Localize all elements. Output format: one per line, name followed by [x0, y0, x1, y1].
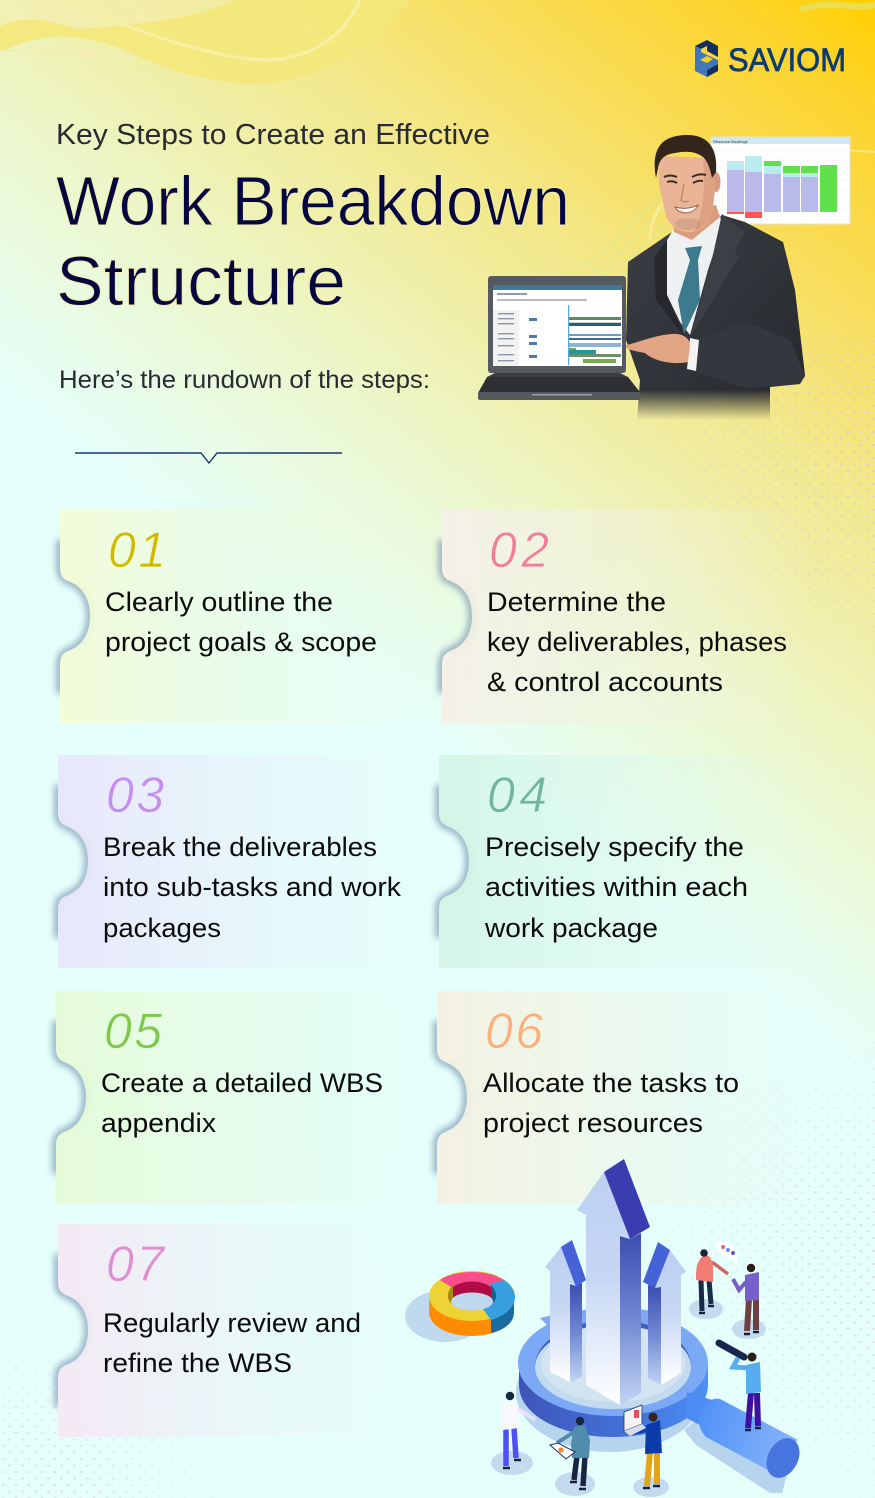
illustration: magnifier with growth arrows [516, 1159, 806, 1493]
person: purple shirt [732, 1264, 766, 1339]
telescope [719, 1343, 744, 1357]
chart card behind the man: Resource Bookings [713, 139, 748, 144]
number 04: 04 [487, 767, 547, 823]
person: telescope viewer [719, 1343, 761, 1430]
step text: Determine the [487, 587, 666, 617]
magnifier ring [519, 1363, 708, 1437]
step text: project resources [483, 1108, 703, 1138]
person: blue jacket with laptop [624, 1405, 669, 1497]
bars [727, 170, 744, 212]
wordmark: SAVIOM [728, 42, 846, 78]
tie [678, 246, 702, 334]
step text: Create a detailed WBS [101, 1068, 383, 1098]
laptop [478, 276, 640, 400]
lid [488, 276, 626, 373]
panel: step 02 [442, 510, 812, 723]
number 01: 01 [108, 522, 166, 578]
step text [487, 587, 787, 697]
person: teal shirt with tablet [550, 1417, 595, 1496]
panel: step 05 [56, 991, 426, 1204]
step text [105, 587, 377, 657]
person: white shirt [491, 1392, 535, 1475]
magnifier shadow [516, 1332, 704, 1452]
cuff [687, 338, 699, 371]
panel: step 03 [58, 755, 428, 968]
step text: appendix [101, 1108, 217, 1138]
magnifier handle neck [686, 1392, 720, 1425]
forearm [715, 328, 805, 388]
title: Work Breakdown [56, 162, 570, 240]
shirt [667, 214, 722, 335]
step text: Allocate the tasks to [483, 1068, 739, 1098]
number 07: 07 [106, 1236, 166, 1292]
tablet [550, 1443, 575, 1459]
step text: & control accounts [487, 667, 723, 697]
screen [493, 285, 622, 366]
title [56, 162, 570, 320]
step text [103, 832, 402, 943]
number 06: 06 [485, 1003, 543, 1059]
step text: packages [103, 913, 221, 943]
ear [714, 172, 720, 192]
dotted texture bottom right [672, 1062, 875, 1480]
panel: step 07 [58, 1224, 428, 1437]
face [658, 156, 715, 232]
cheek shading [694, 158, 715, 232]
stubble [675, 218, 701, 230]
step text: refine the WBS [103, 1348, 292, 1378]
arrow right [643, 1242, 686, 1385]
step text: work package [484, 913, 658, 943]
dotted texture right of header [665, 340, 875, 641]
step text: Regularly review and [103, 1308, 361, 1338]
step text [103, 1308, 361, 1378]
nose [681, 184, 689, 202]
logo: Saviom [695, 40, 846, 78]
icon: Saviom S cube [695, 40, 718, 77]
chart card behind the man [711, 137, 850, 224]
suit jacket [626, 215, 805, 420]
step text [101, 1068, 383, 1138]
panel: step 06 [437, 991, 807, 1204]
speech bubble [716, 1241, 738, 1266]
donut top [429, 1271, 515, 1321]
arrow centre [577, 1159, 650, 1405]
man presenting [623, 135, 805, 420]
gantt bars [569, 317, 621, 320]
arrow left [545, 1240, 586, 1382]
decorative waves behind the man [580, 4, 875, 278]
hair [655, 135, 716, 178]
panel: step 01 [60, 510, 430, 723]
panel: step 04 [439, 755, 809, 968]
divider with chevron [75, 453, 342, 463]
icon: donut chart [405, 1271, 515, 1342]
title: Structure [56, 242, 346, 320]
step text: Break the deliverables [103, 832, 377, 862]
number 05: 05 [104, 1003, 162, 1059]
number 03: 03 [106, 767, 164, 823]
smile [675, 205, 698, 213]
step text: into sub-tasks and work [103, 872, 402, 902]
hand [623, 334, 690, 363]
neck [672, 205, 720, 240]
laptop [624, 1405, 642, 1431]
donut hole [448, 1282, 496, 1310]
step text: Clearly outline the [105, 587, 333, 617]
dotted texture bottom left [2, 1348, 204, 1498]
brows [664, 174, 706, 177]
decorative waves top-left [0, 0, 410, 84]
body [748, 1393, 758, 1428]
number 02: 02 [489, 522, 549, 578]
step text [484, 832, 748, 943]
step text: activities within each [485, 872, 748, 902]
lapels [654, 232, 684, 336]
heading: kicker: Key Steps to Create an Effective [56, 119, 490, 151]
magnifier grip [699, 1399, 798, 1470]
subheading: Here’s the rundown of the steps: [59, 366, 430, 394]
base [487, 373, 628, 377]
person: salmon shirt [689, 1249, 728, 1319]
step text [483, 1068, 739, 1138]
eyes [667, 181, 703, 183]
step text: project goals & scope [105, 627, 377, 657]
step text: key deliverables, phases [487, 627, 787, 657]
step text: Precisely specify the [485, 832, 744, 862]
